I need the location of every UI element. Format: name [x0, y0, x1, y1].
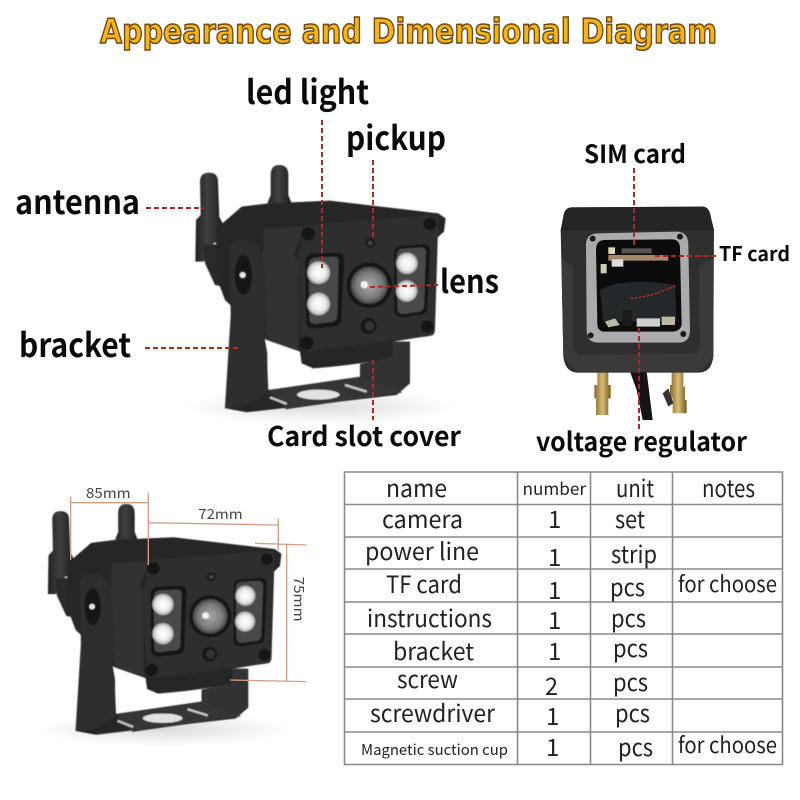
table text: TF card: [386, 565, 462, 600]
table text: for choose: [678, 728, 777, 760]
table text: instructions: [367, 599, 492, 634]
table text: name: [386, 469, 447, 504]
label: lens: [370, 257, 499, 303]
table text: unit: [616, 469, 654, 504]
table text: 1: [548, 571, 561, 606]
table text: strip: [611, 535, 657, 570]
table text: 1: [546, 728, 559, 763]
panel: dimensional view: [37, 483, 309, 747]
table text: 1: [548, 601, 561, 636]
table text: 1: [548, 500, 561, 535]
table text: 2: [545, 667, 558, 702]
label: TF card: TF card: [719, 238, 790, 267]
icon: camera dimension view: [37, 504, 292, 747]
label: bracket: bracket: [19, 319, 131, 367]
icon: opened camera back: [561, 207, 714, 420]
table text: Magnetic suction cup: [361, 739, 508, 760]
label: led light: led light: [246, 66, 369, 114]
table text: pcs: [610, 568, 645, 603]
table text: bracket: [393, 632, 474, 667]
dimension lines: [71, 483, 309, 682]
dimension: 72mm: 72mm: [198, 504, 243, 524]
table text: for choose: [678, 567, 777, 599]
dimension: 75mm: 75mm: [289, 577, 309, 622]
table text: 1: [548, 538, 561, 573]
table text: 1: [546, 697, 559, 732]
table text: screwdriver: [370, 694, 496, 729]
table: parts list: [344, 469, 782, 764]
label: SIM card: SIM card: [584, 135, 686, 171]
panel: open device interior: [536, 135, 790, 459]
label: SIM card: [584, 135, 686, 245]
label: lens: lens: [440, 257, 499, 303]
label: antenna: antenna: [15, 176, 140, 224]
dimension: 85mm: 85mm: [86, 483, 131, 503]
table text: set: [615, 500, 645, 535]
table text: 1: [548, 632, 561, 667]
table text: power line: [365, 532, 479, 567]
table text: [361, 469, 777, 763]
table text: pcs: [615, 694, 650, 729]
table text: notes: [702, 469, 755, 504]
icon: camera front view: [183, 165, 457, 425]
panel: main camera labelled view: [15, 66, 499, 454]
table text: pcs: [613, 629, 648, 664]
table text: pcs: [611, 599, 646, 634]
table text: camera: [382, 500, 463, 535]
label: TF card: [655, 238, 790, 267]
label: pickup: pickup: [346, 112, 446, 160]
table text: screw: [397, 660, 458, 695]
label: pickup: [346, 112, 446, 238]
table text: pcs: [618, 728, 653, 763]
table text: number: [522, 475, 586, 500]
label: voltage regulator: voltage regulator: [536, 422, 748, 459]
label: card slot cover: Card slot cover: [267, 415, 461, 454]
table text: pcs: [613, 663, 648, 698]
